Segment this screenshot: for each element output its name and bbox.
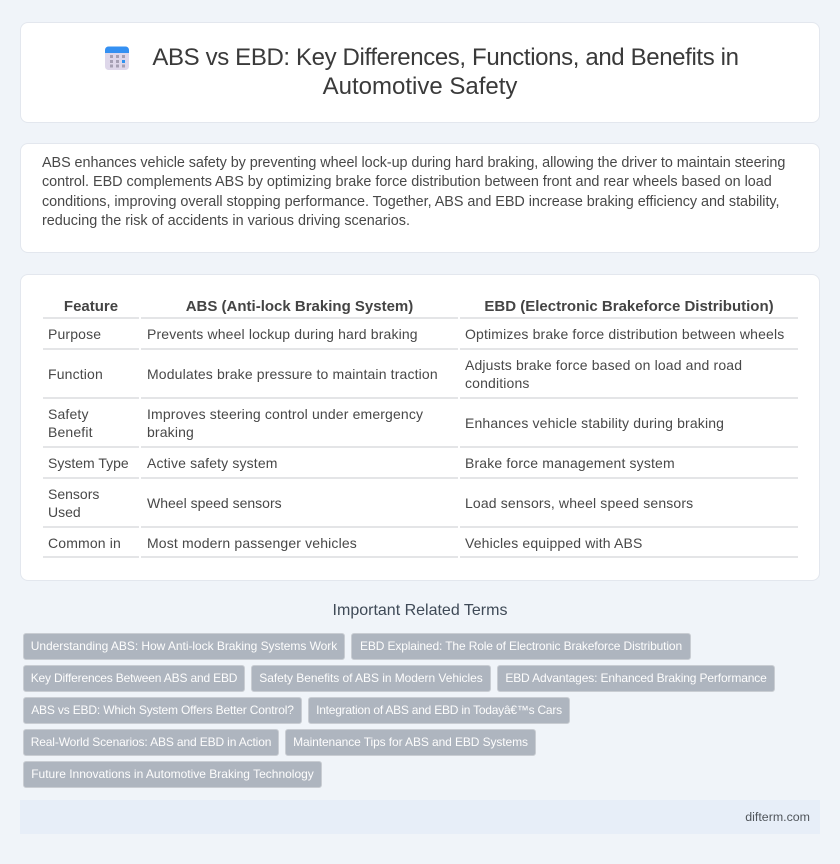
comparison table: Prevents wheel lockup during hard braking xyxy=(147,326,418,342)
comparison table: Vehicles equipped with ABS xyxy=(465,535,642,551)
comparison table: conditions xyxy=(465,375,530,391)
comparison table: Benefit xyxy=(48,424,93,440)
comparison table xyxy=(43,298,798,558)
table panel xyxy=(20,274,820,581)
related term tags: Safety Benefits of ABS in Modern Vehicles xyxy=(259,671,483,685)
related term tags: ABS vs EBD: Which System Offers Better Control? xyxy=(31,703,294,717)
comparison table: Used xyxy=(48,504,81,520)
comparison table: EBD (Electronic Brakeforce Distribution) xyxy=(484,298,774,315)
title xyxy=(152,44,739,100)
comparison table: Safety xyxy=(48,406,89,422)
intro text: control. EBD complements ABS by optimizing brake force distribution between front and rear wheels based on load xyxy=(42,174,772,190)
intro panel xyxy=(20,143,820,253)
comparison table: Most modern passenger vehicles xyxy=(147,535,357,551)
comparison table: Load sensors, wheel speed sensors xyxy=(465,495,693,511)
related term tags: EBD Advantages: Enhanced Braking Performance xyxy=(505,671,767,685)
icon: calendar xyxy=(105,46,129,70)
comparison table: System Type xyxy=(48,455,129,471)
title: Automotive Safety xyxy=(323,73,517,100)
related term tags: EBD Explained: The Role of Electronic Brakeforce Distribution xyxy=(360,639,682,653)
comparison table: braking xyxy=(147,424,194,440)
footer site name: difterm.com xyxy=(745,810,810,824)
related terms heading: Important Related Terms xyxy=(333,602,507,619)
related term tags: Maintenance Tips for ABS and EBD Systems xyxy=(293,735,528,749)
comparison table: Wheel speed sensors xyxy=(147,495,282,511)
related term tags xyxy=(23,633,775,788)
header card xyxy=(20,22,820,123)
intro text: ABS enhances vehicle safety by preventing wheel lock-up during hard braking, allowing the driver to maintain steering xyxy=(42,155,785,171)
related term tags: Key Differences Between ABS and EBD xyxy=(31,671,237,685)
comparison table: Feature xyxy=(64,298,118,315)
footer bar xyxy=(20,800,820,834)
intro text xyxy=(42,155,785,229)
intro text: reducing the risk of accidents in various driving scenarios. xyxy=(42,213,410,229)
comparison table: Improves steering control under emergency xyxy=(147,406,423,422)
related term tags: Integration of ABS and EBD in Todayâ€™s Cars xyxy=(316,703,562,717)
comparison table: Sensors xyxy=(48,486,99,502)
comparison table: Optimizes brake force distribution between wheels xyxy=(465,326,784,342)
comparison table: Function xyxy=(48,366,103,382)
comparison table: Purpose xyxy=(48,326,101,342)
comparison table: Adjusts brake force based on load and road xyxy=(465,357,742,373)
related term tags: Understanding ABS: How Anti-lock Braking Systems Work xyxy=(31,639,337,653)
comparison table: Common in xyxy=(48,535,121,551)
title: ABS vs EBD: Key Differences, Functions, and Benefits in xyxy=(152,44,739,71)
comparison table: Enhances vehicle stability during braking xyxy=(465,415,724,431)
comparison table: Brake force management system xyxy=(465,455,675,471)
comparison table: Active safety system xyxy=(147,455,278,471)
comparison table: ABS (Anti-lock Braking System) xyxy=(186,298,413,315)
intro text: conditions, improving overall stopping performance. Together, ABS and EBD increase braking efficiency and stability, xyxy=(42,194,779,210)
comparison table: Modulates brake pressure to maintain traction xyxy=(147,366,438,382)
related term tags: Real-World Scenarios: ABS and EBD in Action xyxy=(31,735,271,749)
related term tags: Future Innovations in Automotive Braking Technology xyxy=(31,767,314,781)
